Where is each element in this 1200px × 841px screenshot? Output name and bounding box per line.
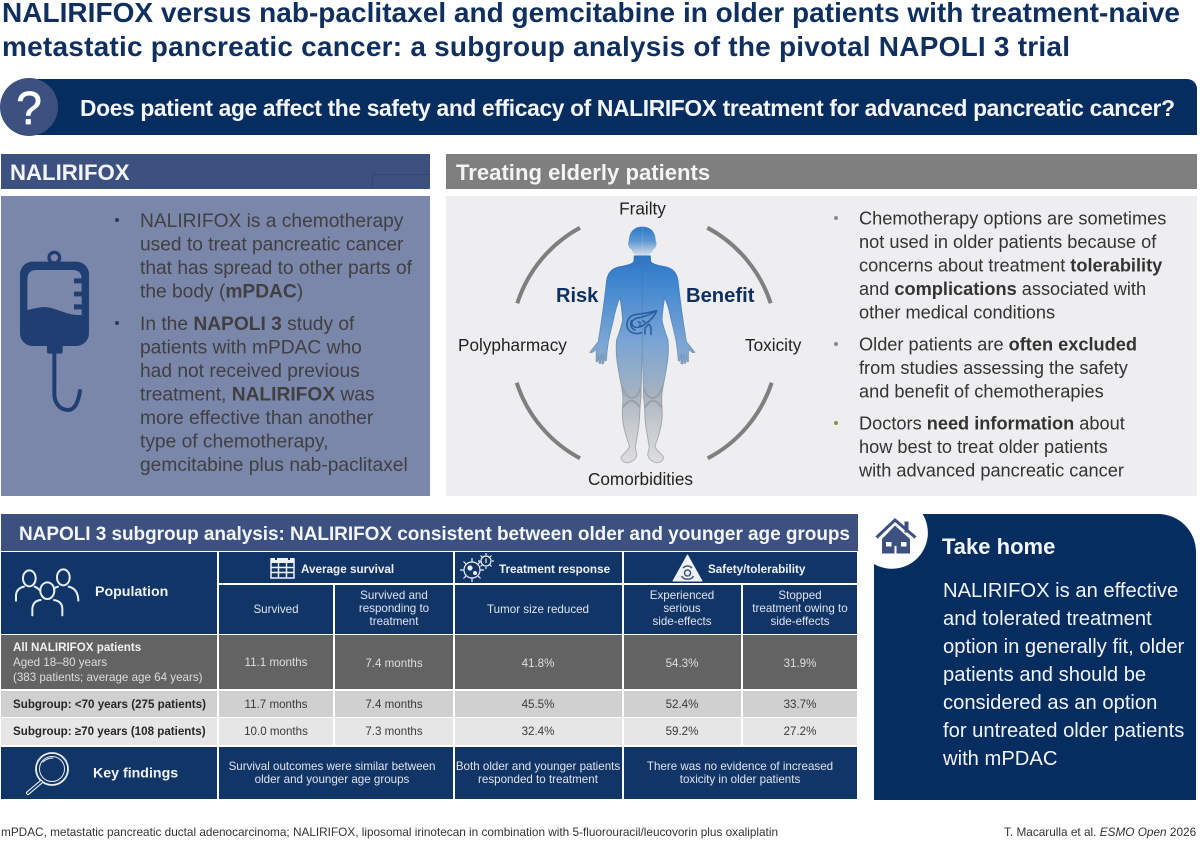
question banner [0,78,1197,136]
text block: NALIRIFOX bullets: gemcitabine plus nab-paclitaxel [140,455,408,476]
heading: Take home: Take home [942,534,1055,559]
label: Toxicity: Toxicity [745,335,802,355]
heading: Treating elderly patients [446,154,1197,189]
subheaders: serious [663,602,701,615]
icon: question mark: ? [16,82,42,134]
icon: house [876,520,916,554]
row: key findings: There was no evidence of increased [647,760,833,773]
text block: elderly bullets: Doctors need information about [859,414,1125,434]
diagram: risk and benefit arcs [517,228,772,458]
text block: take home message: NALIRIFOX is an effective [943,580,1178,602]
subheaders [253,589,848,628]
label: Safety/tolerability: Safety/tolerability [708,563,806,576]
title: metastatic pancreatic cancer: a subgroup analysis of the pivotal NAPOLI 3 trial [2,31,1070,62]
text block: NALIRIFOX bullets: In the NAPOLI 3 study of [140,314,355,335]
text block: elderly bullets: other medical conditions [859,302,1055,322]
label: Treatment response: Treatment response [499,563,611,576]
row: 70 years and over: 27.2% [784,725,816,738]
label: Key findings: Key findings [93,766,178,782]
heading: NALIRIFOX: NALIRIFOX [10,160,130,185]
text block: NALIRIFOX bullets: patients with mPDAC who [140,338,362,358]
text block: NALIRIFOX bullets: more effective than another [140,408,374,429]
row: under 70 years: Subgroup: <70 years (275 patients) [13,698,206,711]
subheaders: Stopped [778,589,822,602]
text block: NALIRIFOX bullets: NALIRIFOX is a chemotherapy [140,211,404,232]
icon: IV bag [20,252,89,410]
icon: population [16,569,78,615]
label: Comorbidities: Comorbidities [588,469,693,489]
text block: elderly bullets: with advanced pancreatic cancer [858,460,1124,480]
subheaders: side-effects [652,615,712,628]
row: 70 years and over: 7.3 months [365,725,423,738]
row: 70 years and over: 10.0 months [244,725,308,738]
row: all patients: 7.4 months [365,657,423,670]
text block: take home message: option in generally fit, older [943,636,1185,658]
label: Average survival: Average survival [301,563,394,576]
row: 70 years and over: Subgroup: ≥70 years (108 patients) [13,725,206,738]
label: Benefit: Benefit [686,285,755,307]
text block: elderly bullets: Older patients are often excluded [859,334,1137,354]
row: 70 years and over [1,718,857,745]
heading: Treating elderly patients: Treating elderly patients [456,160,710,185]
row: all patients: 31.9% [784,657,816,670]
text block: elderly bullets: and complications associated with [859,279,1146,299]
subheaders: responding to [359,602,429,615]
icon: pancreas [627,311,657,335]
text block: elderly bullets: and benefit of chemotherapies [859,382,1104,402]
heading: NALIRIFOX [1,154,430,189]
text block: elderly bullets: how best to treat older patients [859,437,1108,457]
citation: T. Macarulla et al. ESMO Open 2026 [1004,825,1197,839]
text block: elderly bullets: Chemotherapy options are sometimes [859,208,1166,228]
panel: take home [874,514,1196,800]
header row [1,552,857,634]
row: 70 years and over: 59.2% [666,725,698,738]
icon: calendar [271,556,294,578]
subheaders: Survived [253,603,299,616]
row: key findings: Survival outcomes were similar between [229,760,435,773]
row: key findings: toxicity in older patients [680,773,800,786]
label: Polypharmacy: Polypharmacy [458,335,567,355]
row: all patients: 11.1 months [245,656,308,669]
text block: take home message: for untreated older patients [943,720,1184,742]
text block: take home message: and tolerated treatment [943,608,1152,630]
row: all patients [1,635,857,689]
subheaders: Experienced [650,589,714,602]
row: key findings [1,747,857,799]
row: under 70 years: 33.7% [784,698,816,711]
subheaders: side-effects [770,615,830,628]
table title [1,514,858,551]
row: all patients: 54.3% [666,657,698,670]
row: under 70 years: 7.4 months [365,698,423,711]
row: 70 years and over: 32.4% [522,725,554,738]
row: all patients: All NALIRIFOX patients [13,641,141,654]
label: Risk: Risk [556,285,599,307]
subheaders: treatment [370,615,419,628]
text block: NALIRIFOX bullets: treatment, NALIRIFOX was [140,384,375,406]
row: under 70 years [1,691,857,717]
row: key findings: older and younger age groups [255,773,410,786]
table: NAPOLI 3 subgroup analysis [1,514,858,799]
panel: NALIRIFOX [1,196,430,496]
title [2,0,1180,62]
row: all patients: 41.8% [522,657,554,670]
text block: NALIRIFOX bullets: type of chemotherapy, [140,432,328,452]
icon: question mark [0,78,58,136]
row: under 70 years: 52.4% [666,698,698,711]
row: under 70 years: 45.5% [522,698,554,711]
text block: elderly bullets [834,208,1166,480]
icon: biohazard [673,555,702,581]
text block: NALIRIFOX bullets: used to treat pancreatic cancer [140,234,404,256]
label: Frailty: Frailty [619,198,666,218]
row: key findings: responded to treatment [478,773,599,786]
subheaders: Tumor size reduced [487,603,589,616]
text block: NALIRIFOX bullets: had not received previous [140,361,360,382]
panel: Treating elderly patients [446,196,1197,496]
text block: NALIRIFOX bullets [115,211,413,476]
label: Population: Population [95,584,168,600]
row: all patients: Aged 18–80 years [13,656,107,669]
text block: NALIRIFOX bullets: that has spread to other parts of [140,258,413,279]
text block: take home message: patients and should be [943,664,1146,686]
row: all patients: (383 patients; average age 64 years) [13,671,203,684]
text block: take home message: with mPDAC [942,748,1057,770]
text block: take home message [942,580,1185,770]
subheaders: treatment owing to [752,602,848,615]
text block: elderly bullets: concerns about treatment tolerability [859,256,1163,276]
subheaders: Survived and [360,589,428,602]
text block: take home message: considered as an option [943,692,1157,714]
table title: NAPOLI 3 subgroup analysis: NALIRIFOX consistent between older and younger age groups [19,524,850,545]
question banner: Does patient age affect the safety and efficacy of NALIRIFOX treatment for advanced pancreatic cancer? [80,95,1175,121]
text block: elderly bullets: from studies assessing the safety [859,358,1129,378]
row: under 70 years: 11.7 months [245,698,308,711]
icon: human body [590,227,695,463]
icon: magnifying glass [28,753,68,793]
footnote: mPDAC, metastatic pancreatic ductal adenocarcinoma; NALIRIFOX, liposomal irinotecan in combination with 5-fluorouracil/leucovorin plus oxaliplatin [1,825,778,839]
row: key findings: Both older and younger patients [456,760,620,773]
text block: elderly bullets: not used in older patients because of [859,232,1157,252]
text block: NALIRIFOX bullets: the body (mPDAC) [140,282,303,302]
icon: virus [460,553,494,582]
